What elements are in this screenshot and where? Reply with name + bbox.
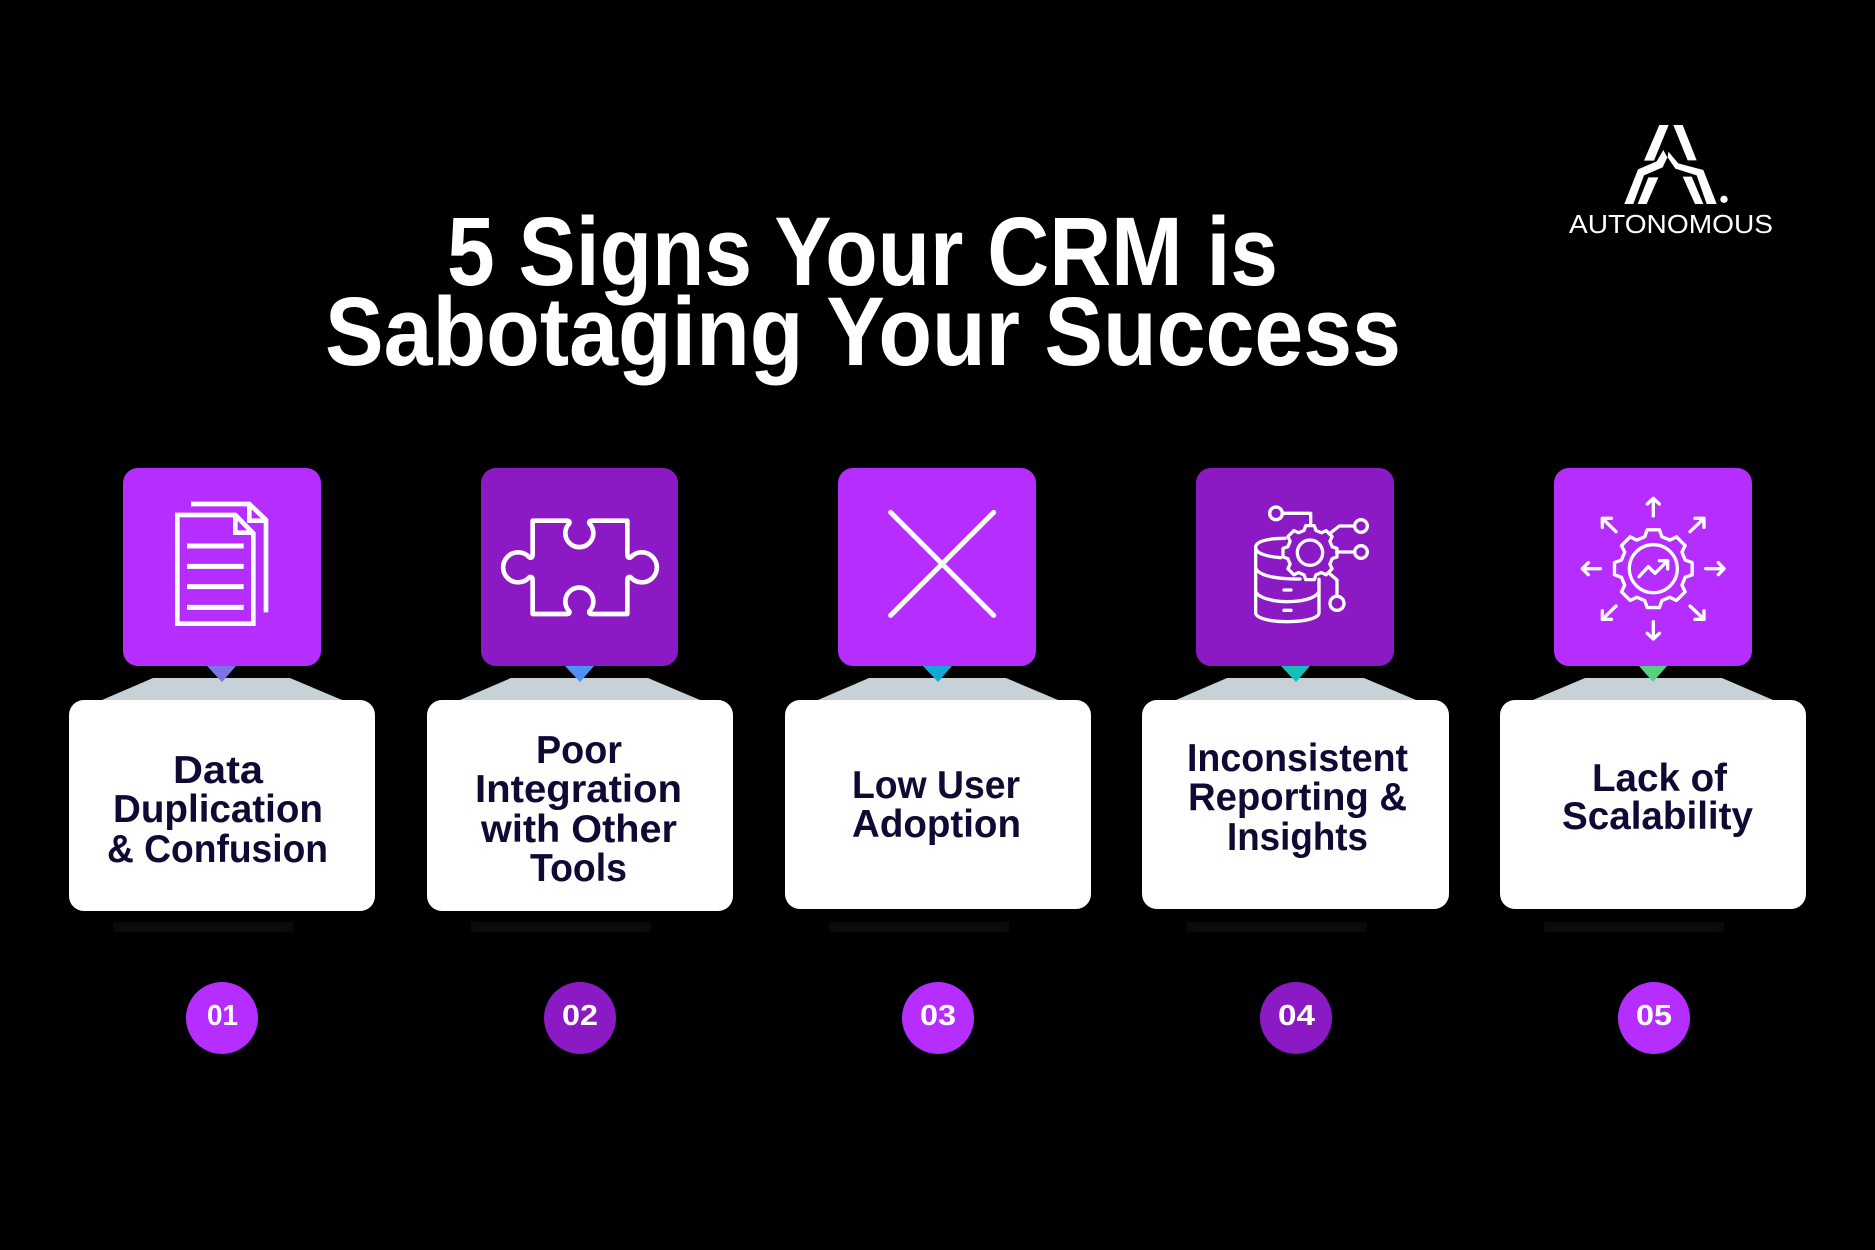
pointer 02 (565, 666, 594, 682)
number badge 01: 01 (207, 1000, 238, 1032)
pointer 04 (1281, 666, 1310, 682)
number badge 01 (186, 982, 258, 1054)
logo: Autonomous: AUTONOMOUS (1569, 209, 1773, 239)
pointer 01 (207, 666, 236, 682)
card text 05 (1562, 757, 1753, 838)
card text 04: Reporting & (1188, 776, 1407, 819)
connector shape 03 (818, 678, 1058, 700)
card 05 (1500, 700, 1806, 909)
panel: item 02 (427, 468, 733, 1054)
card text 01: Data (173, 749, 263, 792)
connector shape 02 (460, 678, 700, 700)
card 03 (785, 700, 1091, 909)
card text 04 (1187, 737, 1408, 859)
card text 02: with Other (480, 808, 677, 851)
logo: Autonomous (1569, 125, 1773, 239)
card text 05: Scalability (1562, 795, 1753, 838)
title: Sabotaging Your Success (325, 277, 1401, 386)
card shadow 01 (113, 922, 293, 932)
pointer 05 (1639, 666, 1667, 682)
card shadow 02 (471, 922, 651, 932)
title: 5 Signs Your CRM is (447, 197, 1278, 306)
number badge 02: 02 (562, 1000, 598, 1032)
card shadow 04 (1187, 922, 1367, 932)
number badge 04: 04 (1278, 1000, 1315, 1032)
number badge 02 (544, 982, 616, 1054)
icon tile 02 (481, 468, 678, 666)
icon tile 05 (1554, 468, 1752, 666)
connector shape 04 (1176, 678, 1416, 700)
card text 04: Insights (1227, 816, 1368, 859)
number badge 05: 05 (1636, 1000, 1672, 1032)
icon: cross (891, 512, 994, 615)
card text 03: Adoption (852, 803, 1021, 846)
icon: gear with growth arrows (1582, 498, 1724, 639)
number badge 04 (1260, 982, 1332, 1054)
card 01 (69, 700, 375, 911)
number badge 03: 03 (920, 1000, 956, 1032)
title (325, 197, 1401, 386)
card text 02 (475, 729, 682, 890)
icon tile 04 (1196, 468, 1394, 666)
card 02 (427, 700, 733, 911)
panel: item 04 (1142, 468, 1449, 1054)
card text 02: Integration (475, 768, 682, 811)
pointer 03 (923, 666, 952, 682)
panel: item 03 (785, 468, 1091, 1054)
card shadow 03 (829, 922, 1009, 932)
card text 03 (852, 764, 1021, 846)
card text 05: Lack of (1592, 757, 1728, 800)
connector shape 01 (102, 678, 342, 700)
card text 01: Duplication (113, 788, 323, 831)
card text 02: Tools (530, 847, 627, 890)
number badge 05 (1618, 982, 1690, 1054)
card text 03: Low User (852, 764, 1020, 807)
card shadow 05 (1544, 922, 1724, 932)
icon tile 01 (123, 468, 321, 666)
icon: database with gear (1256, 507, 1367, 622)
icon: documents (177, 504, 266, 624)
number badge 03 (902, 982, 974, 1054)
panel: item 05 (1500, 468, 1806, 1054)
card text 01: & Confusion (107, 828, 328, 871)
card text 02: Poor (536, 729, 622, 772)
connector shape 05 (1533, 678, 1773, 700)
card text 01 (107, 749, 328, 871)
icon tile 03 (838, 468, 1036, 666)
card 04 (1142, 700, 1449, 909)
icon: puzzle piece (503, 521, 657, 614)
panel: item 01 (69, 468, 375, 1054)
card text 04: Inconsistent (1187, 737, 1408, 780)
